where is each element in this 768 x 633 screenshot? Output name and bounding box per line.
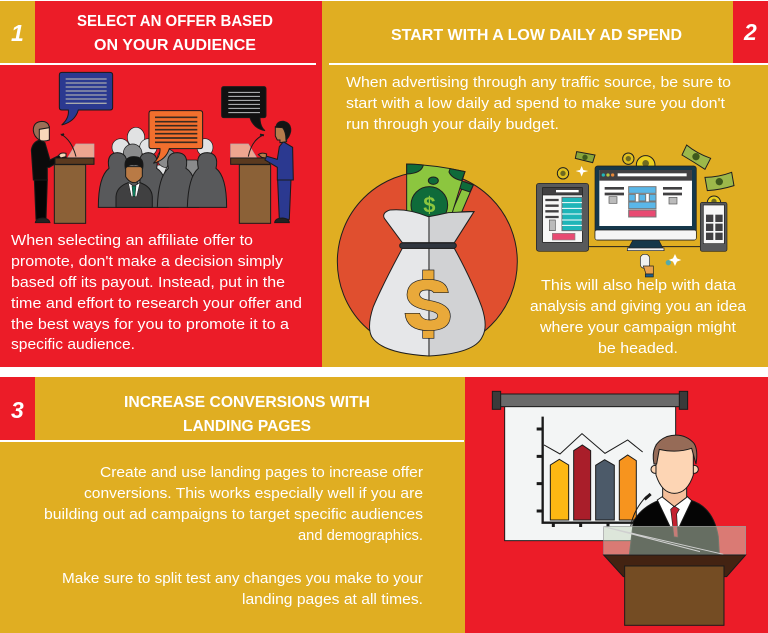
podium [603, 526, 746, 625]
step 2 number badge: 2 [743, 19, 757, 45]
mouse and hand [640, 254, 653, 277]
left speaker [31, 121, 66, 223]
step 1 body text: specific audience. [11, 336, 135, 353]
step 2 heading: START WITH A LOW DAILY AD SPEND [391, 27, 682, 44]
presenter [629, 435, 719, 555]
audience crowd [98, 127, 227, 207]
step 1 body text: promote, don't make a decision simply [11, 253, 284, 270]
step 3 number badge: 3 [11, 397, 24, 423]
step 2 intro text: start with a low daily ad spend to make sure you don't [346, 95, 726, 112]
step 1 body text: When selecting an affiliate offer to [11, 232, 253, 249]
middle row [107, 144, 207, 193]
panel: step 2 [322, 1, 768, 367]
step 3 number badge [0, 377, 35, 440]
step 1 body text [11, 232, 302, 353]
step 1 body text: based off its payout. Instead, put in the [11, 274, 285, 291]
step 2 secondary text: be headed. [598, 340, 678, 357]
step 1 number badge: 1 [11, 20, 24, 46]
bag [384, 210, 474, 243]
floating coins and bills [557, 145, 734, 266]
step 1 heading: SELECT AN OFFER BASED [77, 13, 273, 30]
step 2 intro text: run through your daily budget. [346, 116, 559, 133]
illustration: money bag [337, 164, 517, 356]
right speaker [258, 121, 293, 223]
step 1 heading [77, 13, 273, 54]
step 2 secondary text [530, 277, 747, 357]
speech bubble: orange [149, 111, 203, 163]
front row [98, 153, 227, 207]
step 1 body text: time and effort to research your offer and [11, 295, 302, 312]
step 3 body text: conversions. This works especially well if you are [84, 485, 423, 502]
phone [700, 202, 727, 251]
step 3 body text [44, 464, 423, 608]
step 2 intro text: When advertising through any traffic source, be sure to [346, 74, 731, 91]
step 3 body text: Make sure to split test any changes you make to your [62, 570, 423, 587]
step 3 body text: building out ad campaigns to target specific audiences [44, 506, 423, 523]
dollar sign [405, 270, 450, 338]
step 2 number badge [733, 1, 768, 63]
banknotes [407, 164, 473, 223]
step 1 number badge [0, 1, 35, 63]
banknotes: $ [423, 193, 435, 218]
step 3 body text: and demographics. [298, 527, 423, 544]
speech bubble: black [222, 87, 266, 131]
step 1 body text: the best ways for you to promote it to a [11, 316, 290, 333]
man in audience [116, 183, 152, 207]
step 2 intro text [346, 74, 731, 133]
panel: presenter illustration [465, 377, 768, 633]
step 3 heading [124, 394, 370, 435]
step 2 secondary text: where your campaign might [539, 319, 737, 336]
step 1 heading: ON YOUR AUDIENCE [94, 37, 256, 54]
speech bubble: blue [59, 72, 113, 125]
step 2 secondary text: analysis and giving you an idea [530, 298, 747, 315]
desktop monitor [595, 166, 696, 251]
step 3 body text: landing pages at all times. [242, 591, 423, 608]
illustration: debate speakers and audience [31, 72, 293, 223]
panel: step 3 [0, 377, 465, 633]
step 2 secondary text: This will also help with data [541, 277, 737, 294]
projection screen [492, 391, 688, 541]
right podium [231, 135, 271, 223]
step 3 body text: Create and use landing pages to increase offer [100, 464, 423, 481]
panel: step 1 [0, 1, 322, 367]
tablet [536, 183, 589, 251]
left podium [54, 134, 94, 223]
back row [103, 127, 222, 193]
bar chart on screen [537, 417, 643, 527]
illustration: responsive devices [536, 145, 734, 277]
step 3 heading: INCREASE CONVERSIONS WITH [124, 394, 370, 411]
step 3 heading: LANDING PAGES [183, 418, 311, 435]
